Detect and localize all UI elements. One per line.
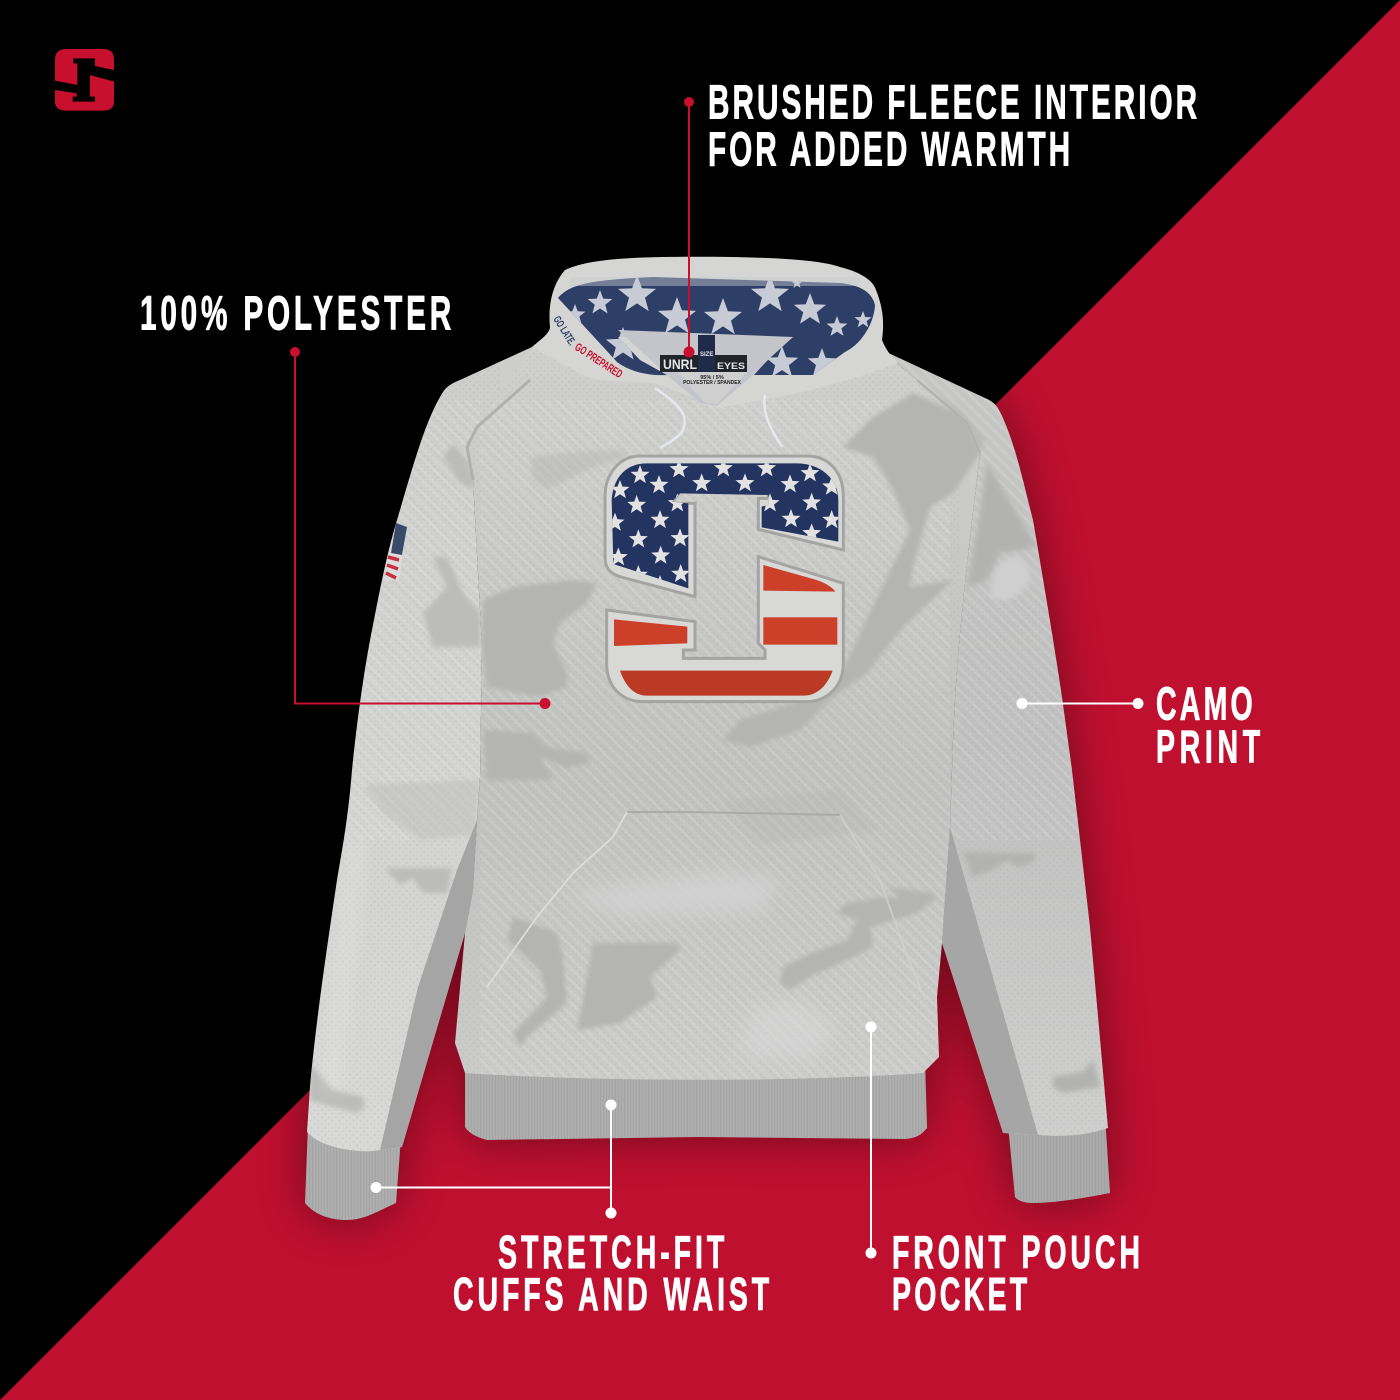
hoodie illustration (300, 257, 1120, 1220)
emblem red stripes (614, 565, 837, 696)
waist hem (465, 1060, 927, 1140)
callout: stretch-fit cuffs and waist (370, 1100, 769, 1321)
hoodie drop shadow (305, 340, 1110, 1220)
callout: camo print: PRINT (1156, 722, 1260, 773)
callout: front pouch pocket (866, 1022, 1140, 1321)
camo blobs (482, 393, 980, 1047)
neck label: EYES (717, 361, 745, 371)
logo (55, 49, 114, 111)
flag patch on sleeve (385, 523, 407, 580)
callout: front pouch pocket: FRONT POUCH (892, 1227, 1140, 1279)
right cuff (1007, 1115, 1110, 1203)
callout: brushed fleece interior: FOR ADDED WARMTH (708, 123, 1070, 176)
raglan seams (467, 380, 530, 480)
hood lining: stars (558, 275, 875, 377)
neck label (660, 335, 747, 404)
callout: 100% polyester (140, 287, 550, 709)
callout: camo print: CAMO (1156, 679, 1253, 730)
neck label: POLYESTER / SPANDEX (683, 380, 742, 386)
left cuff (305, 1125, 402, 1220)
chest S emblem (605, 456, 843, 702)
hood edge text: GO LATE. (550, 314, 578, 348)
left sleeve (300, 340, 532, 1160)
inner neck panel (618, 330, 793, 406)
light fold (590, 872, 774, 916)
callout: stretch-fit cuffs and waist: STRETCH-FIT (498, 1227, 724, 1279)
torso (440, 340, 980, 1100)
neck label: SIZE (700, 352, 713, 358)
callout: brushed fleece interior (684, 76, 1197, 358)
callout: front pouch pocket: POCKET (892, 1269, 1027, 1321)
neck label: 95% / 5% (700, 375, 724, 381)
neck label: UNRL (663, 356, 697, 372)
hood edge red text: GO PREPARED (572, 341, 624, 381)
drawstrings (655, 388, 782, 448)
callout: stretch-fit cuffs and waist: CUFFS AND WAIST (453, 1269, 769, 1321)
front pouch pocket (487, 812, 925, 1000)
hood (532, 257, 898, 448)
callout: brushed fleece interior: BRUSHED FLEECE INTERIOR (708, 76, 1197, 129)
callout: 100% polyester: 100% POLYESTER (140, 287, 451, 340)
emblem stars field (612, 463, 838, 588)
right sleeve (882, 340, 1120, 1140)
callout: camo print (1016, 679, 1260, 773)
